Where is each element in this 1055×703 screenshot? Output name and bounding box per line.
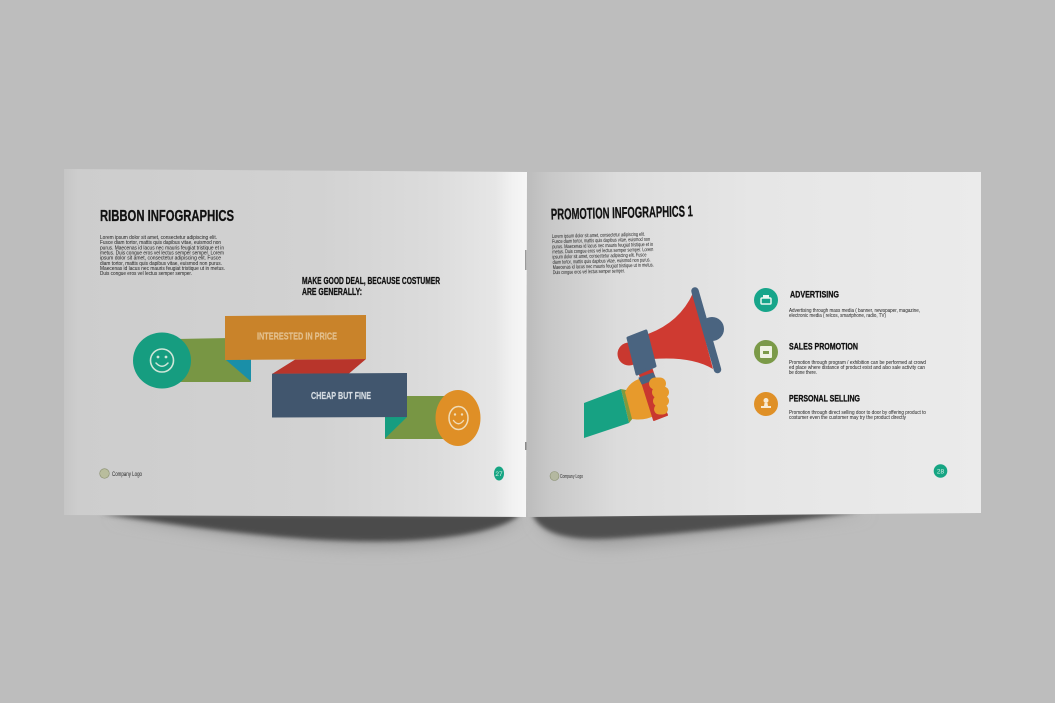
page number 27 (494, 466, 504, 480)
sleeve cuff (621, 389, 633, 423)
text block: left intro: Fusce diam tortor, mattis quis dapibus vitae, euismod non (100, 240, 221, 246)
hand fingers (649, 378, 669, 414)
item: personal selling: PERSONAL SELLING (789, 394, 860, 404)
ribbon tail: left green (176, 338, 251, 382)
item: sales promotion: be done there. (789, 370, 817, 376)
subheading: make good deal: ARE GENERALLY: (302, 286, 362, 298)
megaphone handle (642, 378, 667, 420)
megaphone cone (648, 293, 713, 369)
text block: right intro: diam tortor, mattis quis dapibus vitae, euismod non purus. (553, 257, 651, 266)
icon: person (754, 392, 778, 416)
icon: megaphone in hand (584, 291, 724, 438)
text block: left intro: diam tortor, mattis quis dapibus vitae, euismod non purus. (100, 261, 222, 267)
text block: left intro: ipsum dolor sit amet, consectetur adipiscing elit. Fusce (100, 256, 221, 262)
text block: right intro (552, 232, 654, 276)
text block: right intro: Maecenas id lacus nec mauris feugiat tristique ut in metus. (553, 263, 654, 271)
megaphone handle band (639, 373, 656, 384)
ribbon: cheap but fine (272, 373, 407, 418)
page number 27: 27 (495, 471, 503, 478)
megaphone back cap (618, 342, 640, 366)
ribbon fold: red (272, 359, 366, 374)
text block: right intro: purus. Maecenas id lacus nec mauris feugiat tristique et in (552, 242, 653, 250)
item: advertising: Advertising through mass media ( banner, newspaper, magazine, (789, 308, 920, 314)
text block: left intro: purus. Maecenas id lacus nec mauris feugiat tristique et in (100, 245, 224, 251)
item: sales promotion (754, 340, 926, 376)
item: sales promotion: Promotion through program / exhibition can be performed at crowd (789, 360, 926, 366)
ribbon: cheap but fine: CHEAP BUT FINE (311, 390, 371, 402)
item: personal selling (754, 392, 926, 421)
footer: left logo: Company Logo (112, 472, 142, 478)
hand palm (625, 378, 656, 420)
text block: left intro: metus. Duis congue eros vel lectus semper semper. Lorem (100, 250, 224, 256)
ribbon chart (133, 315, 480, 446)
text block: right intro: Lorem ipsum dolor sit amet, consectetur adipiscing elit. (552, 232, 645, 240)
text block: left intro (100, 235, 225, 277)
footer: right logo (550, 472, 583, 480)
icon: advertising (754, 288, 778, 312)
ribbon: interested in price (225, 315, 366, 360)
text block: left intro: Lorem ipsum dolor sit amet, consectetur adipiscing elit. (100, 235, 217, 241)
text block: right intro: Duis congue eros vel lectus semper semper. (553, 268, 625, 276)
ribbon tail: right green (385, 396, 452, 439)
page shadows (100, 512, 870, 549)
icon: orange smiley badge (436, 390, 480, 446)
item: personal selling: Promotion through direct selling door to door by offering product to (789, 410, 926, 416)
page number 28: 28 (937, 468, 944, 475)
megaphone neck (638, 367, 655, 381)
ribbon fold: blue (226, 360, 251, 382)
footer: left logo (100, 469, 142, 478)
megaphone rear bell (700, 317, 724, 341)
panel: right page (527, 172, 981, 517)
item: advertising (754, 288, 920, 319)
heading: promotion infographics: PROMOTION INFOGRAPHICS 1 (551, 203, 693, 223)
icon: green smiley badge (133, 332, 191, 388)
ribbon fold: teal (385, 417, 407, 438)
item: advertising: electronic media ( relcos, smartphone, radio, TV) (789, 313, 886, 319)
text block: right intro: Fusce diam tortor, mattis quis dapibus vitae, euismod non (552, 237, 650, 245)
panel: left page (64, 169, 527, 517)
item: advertising: ADVERTISING (790, 290, 839, 300)
ribbon: interested in price: INTERESTED IN PRICE (257, 330, 337, 342)
item: sales promotion: SALES PROMOTION (789, 342, 858, 352)
megaphone rim (695, 291, 718, 370)
sleeve (584, 389, 629, 438)
heading: ribbon infographics: RIBBON INFOGRAPHICS (100, 208, 234, 225)
text block: right intro: metus. Duis congue eros vel lectus semper semper. Lorem (552, 247, 654, 255)
footer: right logo: Company Logo (560, 474, 583, 480)
item: personal selling: costumer even the customer may try the product directly (789, 415, 906, 421)
megaphone collar (628, 331, 655, 374)
text block: left intro: Duis congue eros vel lectus semper semper. (100, 271, 192, 277)
text block: left intro: Maecenas id lacus nec mauris feugiat tristique ut in metus. (100, 266, 225, 272)
subheading: make good deal: MAKE GOOD DEAL, BECAUSE COSTUMER (302, 275, 440, 287)
icon: shop (754, 340, 778, 364)
item: sales promotion: ed place where distance of product exist and also sale activity can (789, 365, 925, 371)
text block: right intro: ipsum dolor sit amet, consectetur adipiscing elit. Fusce (552, 252, 647, 261)
page number 28 (934, 464, 947, 478)
subheading: make good deal (302, 275, 440, 298)
